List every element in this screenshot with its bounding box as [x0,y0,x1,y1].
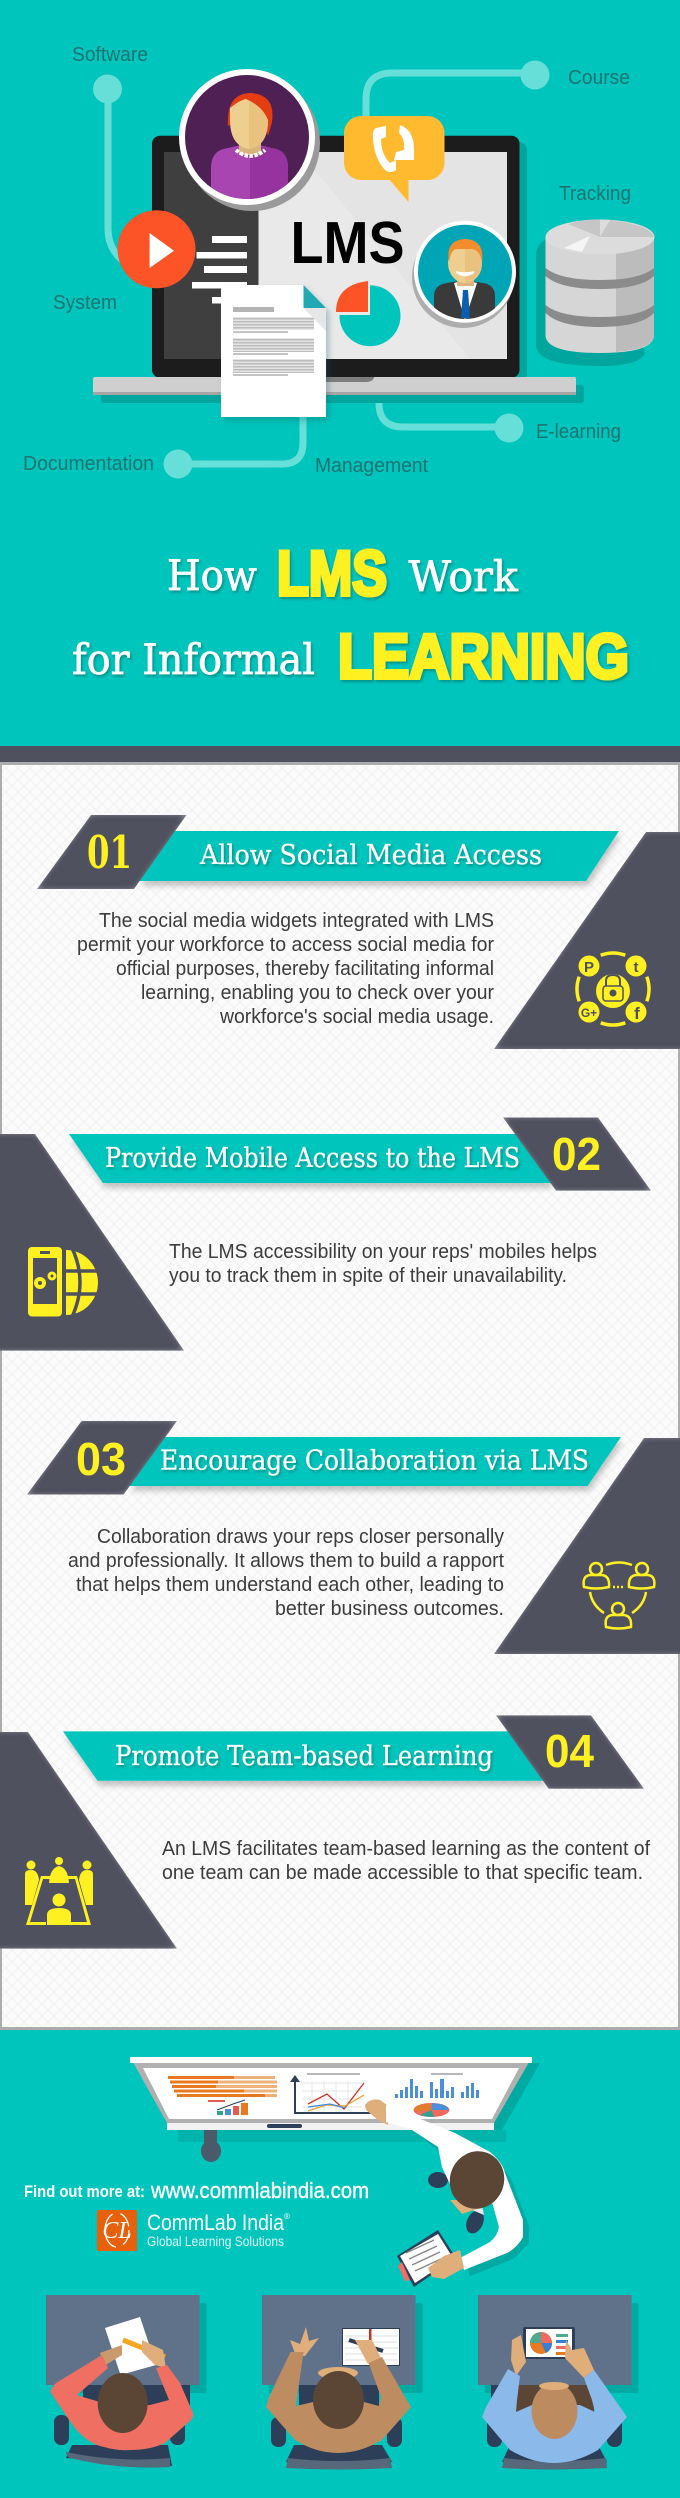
banner 01 [139,831,619,881]
label: e-learning: E-learning [536,421,621,443]
body text 02 [169,1241,597,1287]
whiteboard [130,2057,540,2162]
connector: documentation [164,412,303,478]
logo mark [97,2210,137,2251]
side panel 01 [494,832,680,1049]
section 03 [27,1421,680,1654]
title: How: How [167,551,257,600]
number 03: 03 [76,1433,126,1485]
banner 03 [129,1437,621,1486]
heading 03: Encourage Collaboration via LMS [160,1446,589,1476]
body text 02: you to track them in spite of their unavailability. [169,1265,567,1287]
body text 04: one team can be made accessible to that specific team. [162,1862,643,1884]
heading 02: Provide Mobile Access to the LMS [105,1143,520,1174]
icon: team meeting [25,1857,93,1925]
title: LEARNING: LEARNING [338,622,629,692]
side panel 02 [0,1134,184,1351]
chart: line chart [290,2073,373,2113]
label: system: System [53,292,117,314]
body text 03: and professionally. It allows them to build a rapport [68,1550,504,1572]
body text 01: official purposes, thereby facilitating informal [116,958,494,980]
icon: social media lock: G+ [581,1006,597,1020]
body text 03: that helps them understand each other, leading to [76,1574,504,1596]
section 04 [0,1715,650,1949]
icon: social media lock [577,953,649,1025]
presenter [365,2100,529,2287]
logo name: CommLab India [147,2210,285,2235]
notebook [342,2328,400,2366]
logo mark: CL [102,2218,132,2244]
icon: social media lock: f [634,1004,640,1023]
label: software: Software [72,44,148,66]
connector: course [366,60,550,122]
tablet with pie chart [523,2327,575,2359]
body text 01: workforce's social media usage. [219,1006,494,1028]
content panel [0,762,680,2030]
body text 02: The LMS accessibility on your reps' mobiles helps [169,1241,597,1263]
chart: horizontal bars [168,2076,277,2097]
body text 03: better business outcomes. [275,1598,504,1620]
side panel 04 [0,1732,177,1949]
paper and pencil [105,2317,156,2375]
number 02: 02 [552,1128,601,1180]
student 1 [46,2295,206,2468]
dark band [0,746,680,762]
connector: e-learning [379,393,524,442]
label: tracking: Tracking [559,183,631,205]
chart: small bars [208,2100,248,2115]
student 3 [478,2295,638,2470]
footer background [0,2030,680,2498]
logo [97,2210,290,2251]
title: LMS: LMS [277,539,387,609]
document [221,285,326,417]
website url: www.commlabindia.com [150,2178,369,2203]
main title [72,539,629,692]
banner 02 [69,1134,551,1183]
body text 01 [77,910,494,1028]
body text 01: The social media widgets integrated with LMS [99,910,494,932]
chart: pie [414,2103,450,2117]
logo tagline: Global Learning Solutions [147,2234,284,2249]
find out more: Find out more at: [24,2182,145,2201]
laptop [93,136,584,403]
number tab 01 [37,815,186,889]
student 2 [262,2295,422,2470]
icon: speech bubble with phone [344,116,444,202]
banner 04 [63,1731,544,1781]
icon: pie chart [336,281,400,346]
body text 04 [162,1838,650,1884]
title: Work: Work [408,552,519,601]
icon: mobile and globe [28,1247,100,1317]
avatar: woman [179,69,320,211]
icon: play button [118,210,196,288]
side panel 03 [494,1438,680,1654]
section 01 [37,815,680,1049]
body text 01: learning, enabling you to check over your [141,982,494,1004]
tablet [397,2230,456,2287]
connector: software [93,74,122,260]
body text 03: Collaboration draws your reps closer personally [97,1526,504,1548]
LMS wordmark: LMS [290,210,404,276]
icon: collaboration [584,1562,654,1628]
presenter head [442,2144,512,2216]
number 01: 01 [87,826,132,879]
body text 01: permit your workforce to access social media for [77,934,494,956]
avatar: man [412,221,516,328]
registered mark: ® [284,2212,290,2221]
icon: database [536,220,654,366]
title: for Informal: for Informal [72,635,315,684]
heading 01: Allow Social Media Access [199,840,542,871]
number 04: 04 [545,1725,594,1777]
number tab 04 [496,1715,644,1789]
label: management: Management [315,455,428,477]
header background [0,0,680,746]
call to action [24,2178,369,2203]
body text 04: An LMS facilitates team-based learning as the content of [162,1838,650,1860]
number tab 02 [503,1118,651,1191]
icon: social media lock: t [634,959,638,976]
body text 03 [68,1526,504,1620]
section 02 [0,1118,651,1351]
label: documentation: Documentation [23,453,154,475]
heading 04: Promote Team-based Learning [115,1741,493,1772]
number tab 03 [27,1421,177,1494]
label: course: Course [568,67,630,89]
icon: social media lock: P [584,959,594,976]
chart: blue columns [395,2073,479,2098]
